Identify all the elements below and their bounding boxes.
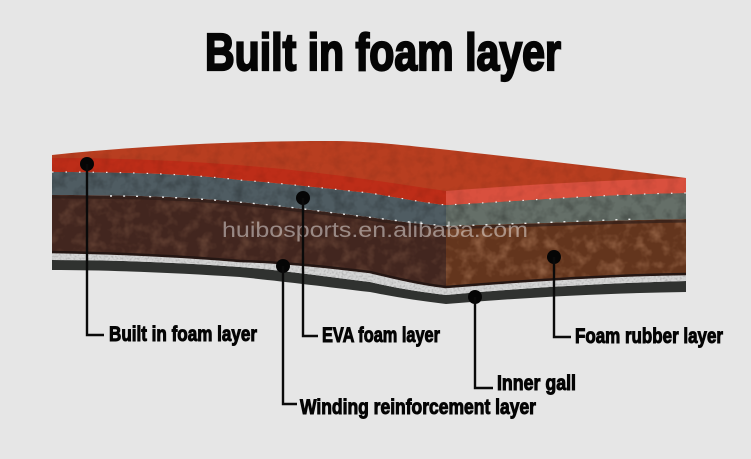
foam layer cross-section xyxy=(52,140,686,304)
callout: winding reinforcement layer: Winding reinforcement layer xyxy=(300,396,536,419)
callout: EVA foam layer: EVA foam layer xyxy=(322,324,440,347)
callout: winding reinforcement layer xyxy=(276,259,536,419)
callout: inner gall xyxy=(468,290,576,395)
brown shadow edges xyxy=(52,252,686,287)
callout: built in foam layer xyxy=(80,157,257,346)
callout: inner gall: Inner gall xyxy=(497,372,576,395)
callout: built in foam layer: Built in foam layer xyxy=(109,323,257,346)
callout: EVA foam layer xyxy=(296,191,440,347)
layer: dark inner gall xyxy=(52,260,686,304)
title: Built in foam layer xyxy=(205,24,561,82)
watermark: huibosports.en.alibaba.com xyxy=(222,219,528,242)
layer: brown foam rubber xyxy=(52,193,686,290)
callout: foam rubber layer xyxy=(547,250,723,348)
layer: grey EVA foam xyxy=(52,170,686,228)
layer: white winding reinforcement xyxy=(52,253,686,295)
layer: red built-in foam xyxy=(52,140,686,206)
white seam dots xyxy=(52,172,686,205)
